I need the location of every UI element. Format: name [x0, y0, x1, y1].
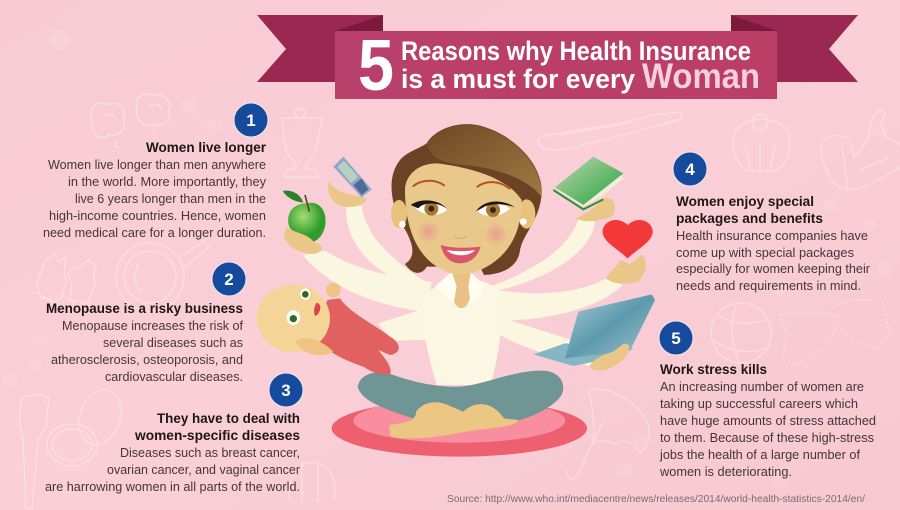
heading 4: packages and benefits: [676, 211, 823, 226]
body 1: high-income countries. Hence, women: [49, 209, 266, 223]
doodle: hand mirror: [116, 241, 209, 311]
badge 2: 2: [224, 270, 234, 289]
badge 5: 5: [671, 329, 681, 348]
torso: [424, 279, 501, 385]
badge 4: 4: [685, 160, 695, 179]
laptop: [533, 294, 655, 366]
heading 4: [676, 194, 823, 226]
body 5: to them. Because of these high-stress: [660, 431, 874, 445]
body 4: needs and requirements in mind.: [676, 279, 861, 293]
section 2: menopause: [46, 262, 246, 384]
doodle: makeup brush: [20, 395, 49, 508]
section 3: women-specific diseases: [45, 373, 303, 494]
heading 1: Women live longer: [146, 140, 267, 155]
section 1: women live longer: [43, 103, 268, 240]
heading 2: Menopause is a risky business: [46, 301, 243, 316]
body 1: live 6 years longer than men in the: [75, 192, 266, 206]
heading 3: They have to deal with: [157, 411, 300, 426]
body 3: are harrowing women in all parts of the world.: [45, 480, 300, 494]
body 5: [659, 380, 876, 479]
face: [405, 163, 522, 274]
feet: [389, 402, 518, 438]
heading 3: [134, 411, 300, 443]
heading 4: Women enjoy special: [676, 194, 814, 209]
hand with phone: [328, 157, 372, 207]
body 4: come up with special packages: [676, 246, 854, 260]
body 1: need medical care for a longer duration.: [43, 226, 266, 240]
ribbon tail left: [257, 15, 383, 82]
illustration: multitasking woman: [257, 124, 655, 457]
body 1: in the world. More importantly, they: [68, 175, 267, 189]
body 5: jobs the health of a large number of: [659, 448, 861, 462]
hair sweep: [427, 125, 542, 197]
left eye: [411, 200, 448, 216]
doodle: ball: [711, 303, 771, 363]
mouth: [441, 245, 481, 263]
body 4: [676, 229, 870, 293]
body 5: taking up successful careers which: [660, 397, 858, 411]
badge 5: [659, 321, 693, 355]
doodle: shell: [289, 462, 335, 502]
cheeks: [416, 220, 508, 246]
doodle: cupcake: [733, 114, 790, 171]
title line 1: Reasons why Health Insurance: [401, 36, 751, 66]
hand with apple: [283, 191, 326, 254]
body 1: Women live longer than men anywhere: [48, 158, 266, 172]
badge 3: 3: [281, 381, 291, 400]
hand with book: [553, 157, 623, 221]
heart: [603, 220, 653, 258]
body 3: ovarian cancer, and vaginal cancer: [107, 463, 300, 477]
ribbon fold right: [731, 15, 777, 31]
arms: [303, 205, 623, 367]
badge 1: 1: [246, 111, 256, 130]
earrings: [399, 218, 527, 228]
body 2: cardiovascular diseases.: [105, 370, 243, 384]
doodle: bow: [780, 300, 890, 366]
body 2: atherosclerosis, osteoporosis, and: [51, 353, 243, 367]
collar and neck: [435, 267, 484, 308]
section 5: work stress: [659, 321, 876, 479]
ribbon fold left: [335, 15, 383, 31]
doodle: hair straightener: [538, 112, 682, 150]
body 4: Health insurance companies have: [676, 229, 868, 243]
ribbon tail right: [731, 15, 858, 82]
legs: [358, 371, 563, 421]
body 5: women is deteriorating.: [659, 465, 792, 479]
body 3: [45, 446, 300, 494]
eyebrows: [413, 181, 509, 189]
heading 3: women-specific diseases: [134, 428, 300, 443]
hand under heart: [606, 255, 646, 284]
section 4: special packages: [673, 152, 870, 293]
doodle: gloves: [33, 254, 96, 308]
body 5: An increasing number of women are: [660, 380, 864, 394]
body 3: Diseases such as breast cancer,: [120, 446, 300, 460]
body 4: especially for women keeping their: [676, 262, 870, 276]
badge 2: [212, 262, 246, 296]
body 2: Menopause increases the risk of: [62, 319, 244, 333]
hair: [392, 124, 542, 275]
body 5: have huge amounts of stress attached: [660, 414, 876, 428]
doodle: umbrella: [567, 389, 649, 479]
nose: [454, 236, 467, 238]
hand with laptop: [589, 343, 629, 371]
mat: [332, 399, 587, 457]
doodle: roses: [91, 94, 170, 148]
source line: Source: http://www.who.int/mediacentre/news/releases/2014/world-health-statistics-2014/en/: [447, 493, 865, 505]
body 1: [43, 158, 267, 240]
banner body: [335, 31, 777, 99]
body 2: [51, 319, 244, 384]
doodle: boot: [821, 110, 900, 190]
badge 3: [269, 373, 303, 407]
title banner: [257, 15, 858, 106]
right eye: [476, 202, 515, 217]
heading 5: Work stress kills: [660, 362, 767, 377]
title line 2: is a must for every: [401, 64, 635, 94]
badge 4: [673, 152, 707, 186]
title number: 5: [358, 26, 394, 106]
badge 1: [234, 103, 268, 137]
body 2: several diseases such as: [103, 336, 243, 350]
title accent word: Woman: [642, 57, 760, 96]
doodle: cup: [282, 108, 322, 177]
ears: [391, 199, 535, 229]
doodle: compact: [47, 384, 128, 466]
baby: [257, 283, 399, 375]
